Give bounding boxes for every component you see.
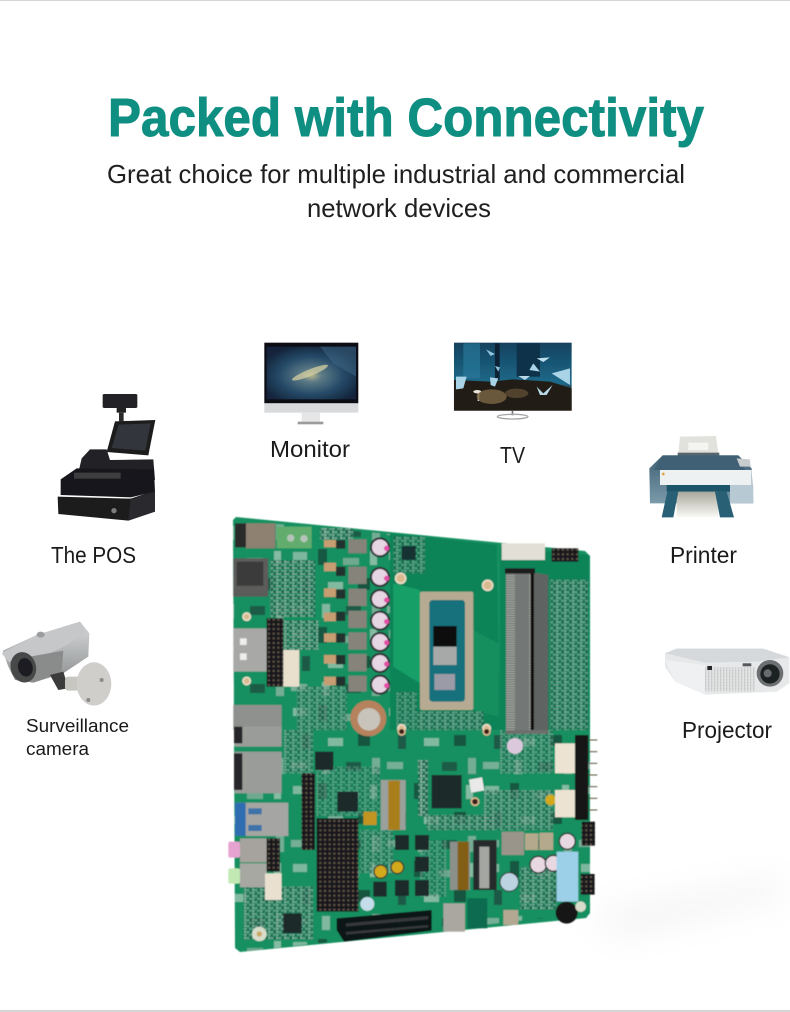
capacitors [371, 538, 389, 694]
small beige inductor [503, 910, 518, 925]
title: Packed with Connectivity [108, 88, 704, 148]
CR battery [350, 700, 386, 736]
DIP switch [363, 812, 377, 825]
USB ports [235, 803, 288, 836]
voltage regulator inductors [348, 539, 367, 692]
ethernet port [233, 705, 282, 730]
rear header [267, 838, 280, 872]
board lower half components [228, 727, 597, 942]
mSATA slot [473, 840, 497, 890]
SIM slot [443, 903, 465, 932]
MOSFET rows [324, 540, 345, 686]
dark shield area [467, 898, 487, 928]
HDMI port [233, 558, 268, 597]
white connector [283, 650, 299, 687]
mounting holes [243, 573, 493, 732]
DC jack [235, 523, 275, 548]
board shadow [590, 880, 790, 935]
subtitle [107, 159, 685, 223]
SO-DIMM slots [505, 568, 548, 730]
label: TV: TV [500, 442, 526, 468]
ethernet ports [234, 727, 282, 793]
motherboard [228, 517, 597, 952]
subtitle: Great choice for multiple industrial and commercial [107, 159, 685, 189]
SATA inductors [502, 832, 553, 855]
label: The POS: The POS [51, 542, 136, 568]
terminal block [277, 527, 312, 548]
label: Surveillance camera: camera [26, 738, 90, 759]
pin header [267, 618, 283, 687]
large pin header block [317, 818, 358, 912]
pin header [302, 773, 315, 850]
icon: projector [665, 649, 789, 695]
lower capacitors [360, 738, 575, 911]
buzzer [556, 902, 578, 924]
top white connector [502, 543, 545, 560]
top IC [402, 546, 416, 560]
icon: POS terminal [58, 394, 155, 521]
icon: surveillance camera [2, 622, 111, 706]
PCIe slot [337, 910, 432, 942]
SO-DIMM slot ends [506, 730, 548, 734]
audio jacks [228, 838, 267, 887]
icon: printer [649, 436, 753, 518]
standoff holes [398, 728, 490, 805]
label: Projector: Projector [682, 717, 772, 743]
label: Printer: Printer [670, 542, 737, 568]
side pin headers [575, 735, 597, 895]
icon: monitor [264, 343, 358, 424]
label: Surveillance camera: Surveillance [26, 715, 129, 736]
gold capacitors [374, 795, 556, 878]
label: Monitor: Monitor [270, 436, 350, 462]
board upper half components [233, 523, 589, 736]
label: Surveillance camera [26, 715, 129, 759]
side connectors [555, 743, 575, 817]
light blue connector [557, 852, 578, 902]
QR label [469, 777, 484, 793]
M.2 slot A [381, 780, 406, 830]
top pin header [552, 548, 578, 562]
DisplayPort [233, 628, 267, 672]
icon: TV [454, 343, 572, 419]
ICs [283, 752, 462, 933]
subtitle: network devices [307, 193, 491, 223]
CPU package [420, 592, 473, 710]
M.2 slot B [450, 842, 470, 890]
small white connector [265, 873, 282, 900]
corner mount hole [252, 901, 586, 941]
